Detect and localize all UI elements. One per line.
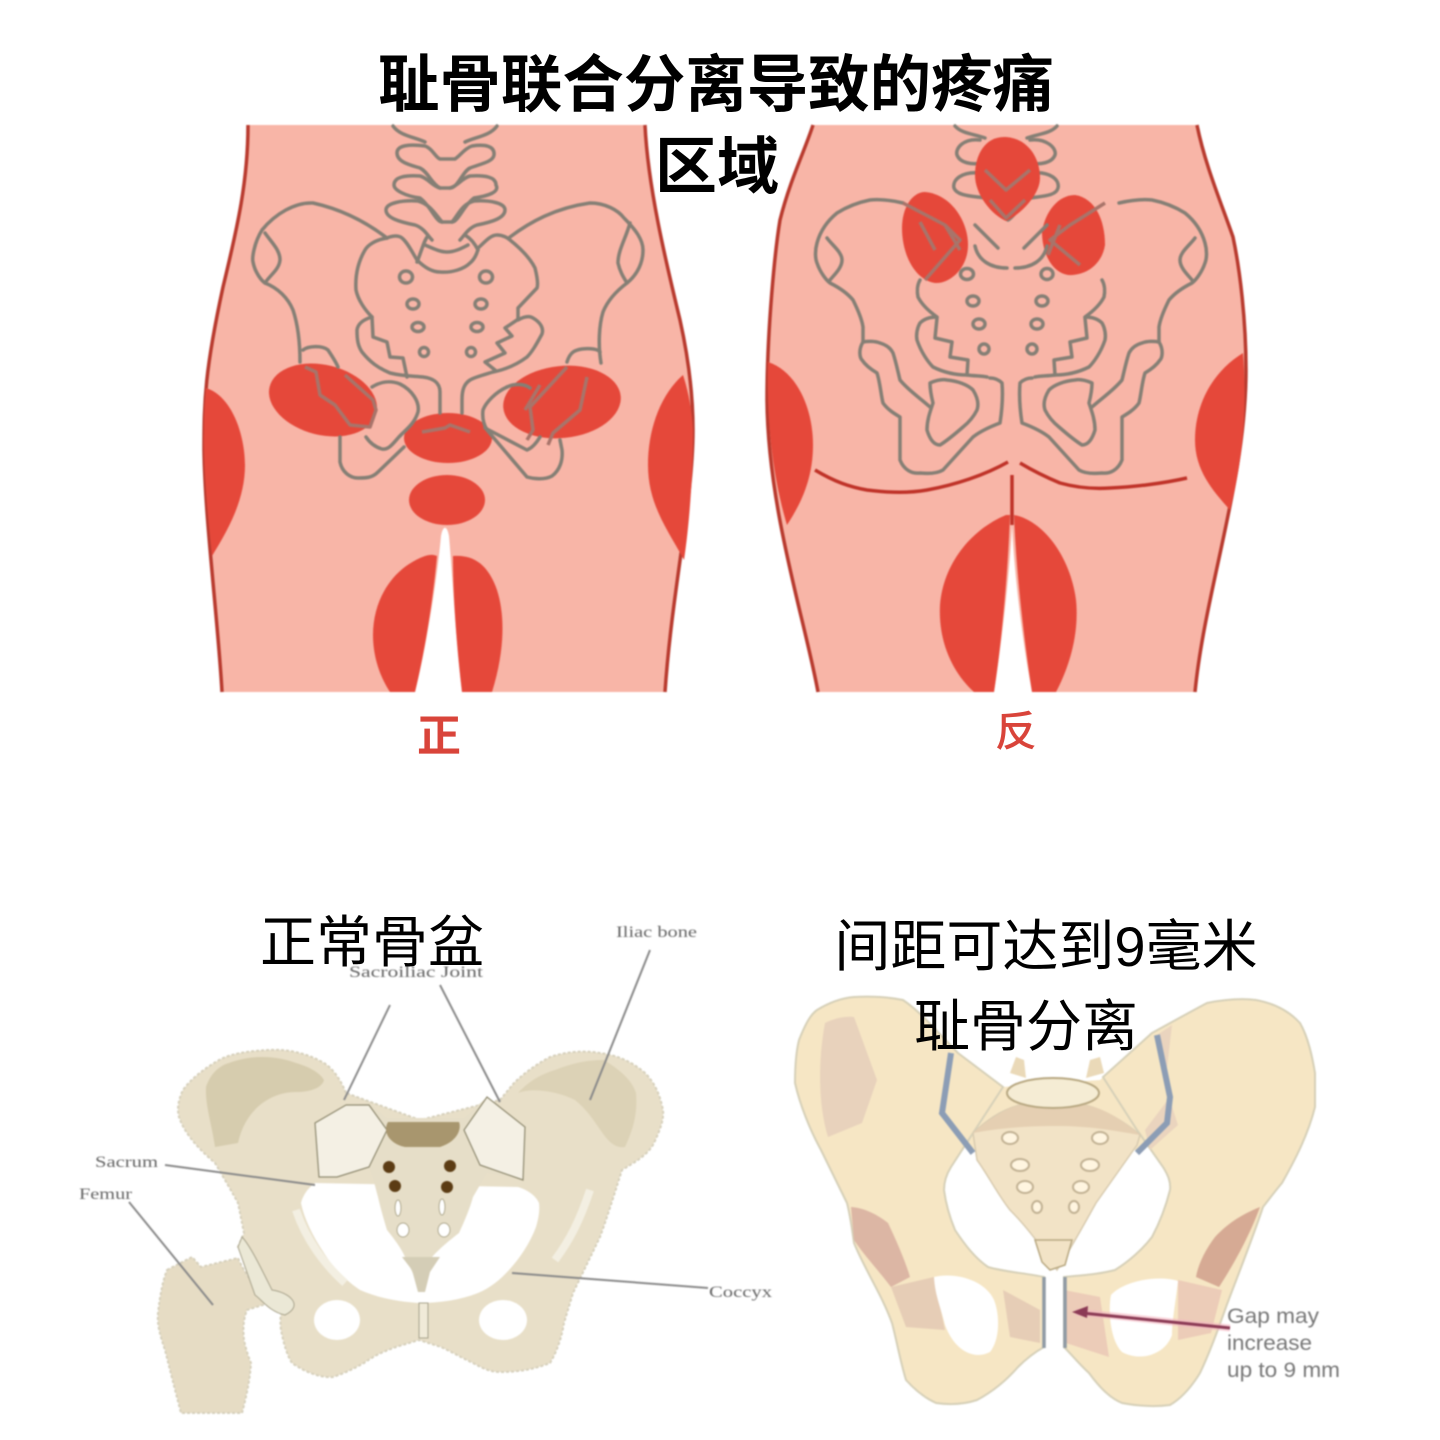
pelvis body	[178, 1050, 663, 1377]
body fill back	[767, 125, 1246, 692]
heading: gap distance	[834, 915, 1258, 1058]
pubic gap	[1044, 1277, 1065, 1348]
anatomical labels: Iliac bone	[616, 924, 697, 941]
sacral foramina back	[960, 268, 1053, 354]
title	[378, 51, 1054, 202]
coccyx	[1035, 1240, 1072, 1270]
sacral wings	[315, 1097, 525, 1180]
title: 区域	[655, 133, 779, 202]
sacrum	[973, 1105, 1140, 1270]
sacral foramina	[1002, 1132, 1108, 1213]
pink shading upper ilium	[820, 1017, 877, 1137]
bone lines over pain areas back	[903, 170, 1105, 280]
sacroiliac joints	[942, 1035, 1170, 1153]
acetabulum joint	[238, 1237, 294, 1315]
gap arrow	[1072, 1306, 1230, 1328]
panel: normal pelvis illustration	[79, 924, 772, 1413]
pelvis bones front	[253, 126, 643, 479]
pelvis bones back left	[816, 200, 1007, 473]
obturator holes	[314, 1300, 360, 1340]
panel: separated pubis illustration	[795, 997, 1340, 1406]
anatomical labels: Coccyx	[709, 1284, 772, 1301]
label: back: 反	[995, 708, 1037, 755]
heading: gap distance: 耻骨分离	[914, 995, 1138, 1058]
right hip bone	[1064, 999, 1315, 1406]
sacrum	[314, 1097, 526, 1290]
obturator holes	[934, 1276, 998, 1355]
pointer lines	[129, 950, 708, 1305]
coccyx	[402, 1257, 440, 1292]
transverse processes	[1010, 1057, 1104, 1078]
pain areas back	[768, 137, 1245, 692]
panel: back view pain regions	[767, 125, 1246, 692]
anatomical labels: Sacrum	[95, 1154, 159, 1171]
gap label: increase	[1227, 1332, 1312, 1355]
sacral band	[973, 1105, 1140, 1135]
panel: front view pain regions	[204, 125, 693, 692]
left hip bone	[795, 997, 1044, 1404]
sacral foramina front	[400, 271, 492, 356]
buttock crease	[815, 462, 1187, 525]
anatomical labels	[79, 924, 772, 1301]
anatomical labels: Femur	[79, 1186, 133, 1203]
pain areas front	[204, 353, 693, 692]
heading: gap distance: 间距可达到9毫米	[834, 915, 1258, 978]
femur	[158, 1257, 269, 1413]
body side outlines back	[767, 125, 1246, 692]
sacral base wings	[942, 1033, 1170, 1150]
pelvic inlet	[301, 1183, 539, 1303]
iliac fossa shading	[206, 1057, 324, 1147]
body side outlines front	[204, 125, 693, 692]
pelvis bones back right	[1015, 200, 1206, 473]
sacral disc	[1007, 1078, 1099, 1108]
heading: normal pelvis: 正常骨盆	[260, 911, 484, 974]
label: front: 正	[417, 712, 461, 761]
bright rim	[296, 1190, 590, 1283]
gap label: up to 9 mm	[1227, 1359, 1340, 1382]
gap label: Gap may	[1227, 1305, 1320, 1328]
pubic symphysis	[419, 1303, 428, 1338]
sacral promontory	[386, 1122, 460, 1147]
pink shading lower hip bone	[891, 1277, 945, 1330]
bone lines over pain areas front	[305, 367, 587, 445]
spine lobes back	[954, 126, 1058, 220]
anatomical labels: Sacroiliac Joint	[349, 964, 484, 981]
gap label	[1227, 1305, 1340, 1382]
sacral foramina	[383, 1160, 456, 1193]
body fill front	[204, 125, 693, 692]
title: 耻骨联合分离导致的疼痛	[378, 51, 1054, 120]
